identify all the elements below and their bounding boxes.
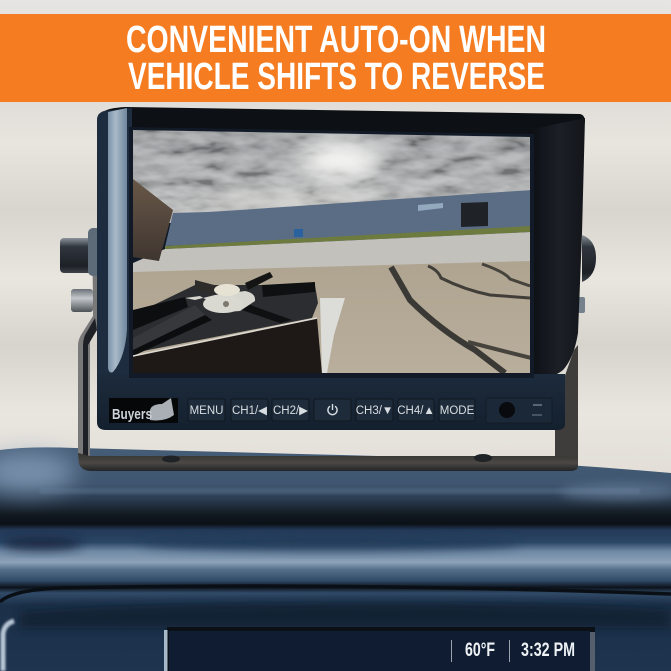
- control panel: brand logo: [109, 398, 178, 423]
- camera: sky: [133, 128, 531, 223]
- camera image: [133, 128, 531, 374]
- dashboard: dark mid patch left: [2, 537, 82, 551]
- camera: pavement crack branch one: [428, 266, 530, 298]
- camera: pavement crack branch three: [468, 342, 531, 358]
- camera: pavement crack branch two: [482, 264, 530, 286]
- monitor hood right side: [528, 118, 585, 380]
- camera: building door: [461, 202, 488, 227]
- radio display: separator two: [509, 640, 510, 662]
- button: channel four: [397, 399, 435, 421]
- mount: bracket right arm: [555, 345, 578, 460]
- monitor body: [97, 374, 565, 430]
- radio display: left chrome edge: [164, 630, 168, 671]
- mount: right knob: [582, 235, 596, 282]
- camera: building: [165, 190, 531, 247]
- camera: machine back arm: [245, 272, 273, 290]
- button: mode: [439, 399, 475, 421]
- control panel: brand logo: Buyers: [112, 406, 152, 423]
- camera: machine right fin: [262, 282, 315, 297]
- monitor hood top: [103, 107, 585, 137]
- radio display: screen: [169, 631, 590, 671]
- monitor screen frame: [129, 127, 534, 378]
- camera: machine lower fin: [133, 305, 205, 350]
- camera: cloud texture: [133, 128, 531, 223]
- banner: [0, 14, 671, 102]
- button: menu: [188, 399, 225, 421]
- camera: machine front box: [133, 318, 322, 374]
- mount: base screw right: [474, 454, 492, 462]
- dashboard: lower shaded band: [20, 603, 671, 628]
- camera: white board: [320, 298, 345, 373]
- camera: lower sky haze: [200, 190, 380, 210]
- dashboard: [0, 447, 671, 671]
- camera: overhead box: [133, 179, 173, 261]
- camera: machine left block: [195, 280, 214, 285]
- radio display: bezel: [167, 627, 595, 671]
- button: menu: MENU: [190, 405, 223, 417]
- button: channel two: [272, 399, 309, 421]
- camera: machine right lower fin: [242, 304, 292, 323]
- banner: orange strip: [0, 14, 671, 102]
- monitor hood left dark side: [97, 108, 132, 380]
- button: channel four: CH4/▲: [397, 405, 435, 417]
- camera: concrete: [133, 261, 531, 374]
- mount: bracket left arm shadow: [83, 318, 97, 456]
- camera: machine lower fin shadow: [133, 315, 212, 356]
- mount: right bolt: [578, 297, 585, 313]
- dashboard: groove: [0, 586, 671, 602]
- radio display: right chrome edge: [590, 632, 595, 671]
- mount: bracket left arm: [78, 228, 100, 456]
- camera: blue object: [294, 229, 303, 237]
- button: channel three: [356, 399, 393, 421]
- camera: grass: [165, 226, 531, 249]
- button: power: [314, 399, 351, 421]
- camera: machine left fin: [133, 297, 188, 330]
- camera: box highlight edge: [133, 318, 317, 356]
- dashboard: highlight on top right: [560, 484, 671, 500]
- camera: pavement crack main: [391, 267, 505, 373]
- camera: white hub: [185, 284, 255, 313]
- button: channel three: CH3/▼: [356, 405, 393, 417]
- button: channel one: [231, 399, 268, 421]
- camera: road: [133, 232, 531, 273]
- dashboard: lower left chrome corner: [3, 621, 14, 671]
- button: channel two: CH2/▶: [273, 405, 309, 417]
- sensor panel: [486, 398, 552, 423]
- radio display: separator one: [451, 640, 452, 662]
- camera: building awning: [418, 203, 443, 211]
- button: mode: MODE: [440, 405, 475, 417]
- dashboard: highlight on crease: [40, 488, 640, 494]
- monitor hood left light strip: [108, 108, 127, 372]
- control panel: [109, 398, 552, 423]
- dashboard: lighter shading on top left: [0, 452, 76, 492]
- banner: first headline line: CONVENIENT AUTO-ON WHEN: [126, 19, 546, 61]
- mount: left knob: [60, 228, 100, 276]
- camera: machine plate: [133, 285, 318, 353]
- button: channel one: CH1/◀: [232, 405, 268, 417]
- radio display: clock: 3:32 PM: [521, 640, 575, 661]
- mount: left bolt: [71, 289, 93, 312]
- camera: hub bolt: [223, 301, 229, 307]
- background: wall: [0, 0, 671, 480]
- radio display: temperature: 60°F: [465, 640, 495, 661]
- mount: bracket base: [78, 453, 578, 471]
- mount: base screw left: [162, 456, 180, 462]
- dashboard: dark mid patch centre: [140, 535, 520, 551]
- camera: sun glow: [298, 140, 382, 180]
- monitor assembly: [60, 107, 596, 471]
- radio display: [164, 627, 595, 671]
